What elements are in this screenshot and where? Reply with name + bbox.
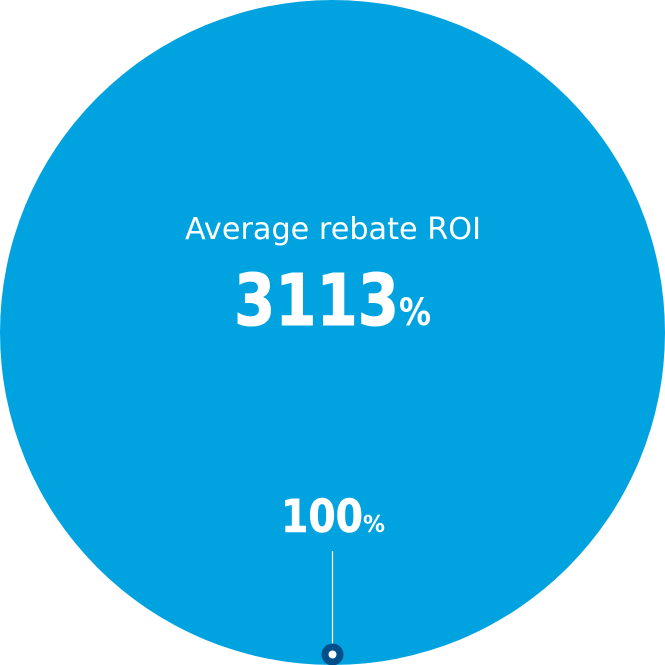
value: 3113%: % — [399, 291, 431, 334]
value: 3113%: 3113 — [234, 259, 399, 342]
label: Average rebate ROI: Average rebate ROI — [185, 212, 481, 247]
value: 100%: 100 — [281, 490, 363, 543]
leader line — [332, 551, 334, 654]
value: 100%: % — [363, 512, 385, 538]
marker: 100% point — [322, 644, 344, 665]
